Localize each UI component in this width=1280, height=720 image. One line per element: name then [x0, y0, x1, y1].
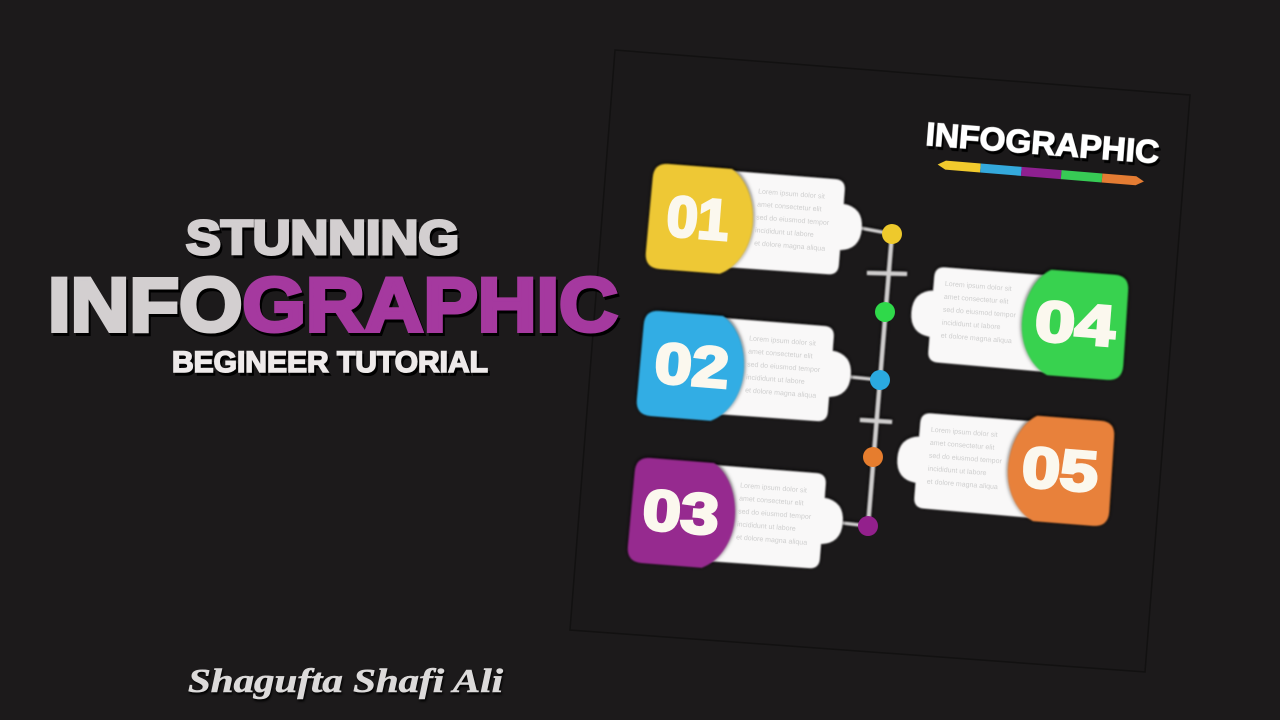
timeline dots	[858, 224, 902, 536]
card 04 text: incididunt ut labore	[942, 320, 1001, 331]
card 04 text: et dolore magna aliqua	[941, 333, 1012, 345]
card 02 text: incididunt ut labore	[746, 374, 805, 386]
card 04 text: amet consectetur elit	[944, 294, 1009, 306]
card 02 text: Lorem ipsum dolor sit	[749, 335, 816, 348]
card 02 text: et dolore magna aliqua	[745, 387, 816, 400]
card 03	[627, 457, 846, 578]
panel: tilted infographic sheet	[570, 50, 1190, 672]
author signature: Shagufta Shafi Ali	[188, 663, 504, 700]
card 03 text: Lorem ipsum dolor sit	[740, 482, 807, 495]
card 01	[645, 163, 865, 284]
card 02 text: amet consectetur elit	[748, 348, 813, 360]
card 05	[894, 405, 1116, 527]
card 04	[908, 259, 1130, 381]
card 05 number: 05	[1020, 435, 1101, 505]
card 02 text: sed do eiusmod tempor	[747, 361, 821, 374]
card 03 text: et dolore magna aliqua	[736, 534, 807, 547]
heading line: BEGINEER TUTORIAL: BEGINEER TUTORIAL	[172, 346, 488, 379]
timeline connector	[842, 228, 907, 526]
card 04 number: 04	[1033, 289, 1118, 359]
card 03 text: sed do eiusmod tempor	[738, 508, 812, 521]
card 02 number: 02	[652, 331, 731, 401]
card 04 text: sed do eiusmod tempor	[943, 307, 1017, 319]
colour bar under panel title	[937, 160, 1144, 186]
card 01 text: sed do eiusmod tempor	[756, 214, 830, 227]
card 05 text: sed do eiusmod tempor	[929, 453, 1003, 465]
card 03 number: 03	[640, 478, 721, 548]
card 04 text: Lorem ipsum dolor sit	[945, 281, 1012, 293]
card 05 text: Lorem ipsum dolor sit	[931, 427, 998, 439]
card 01 text: incididunt ut labore	[755, 227, 814, 239]
card 03 text: incididunt ut labore	[737, 521, 796, 533]
card 01 text: Lorem ipsum dolor sit	[758, 188, 825, 201]
card 05 text: et dolore magna aliqua	[927, 479, 998, 491]
heading line: INFOGRAPHIC: INFOGRAPHIC	[48, 263, 618, 348]
card 01 text: et dolore magna aliqua	[754, 240, 825, 253]
card 05 text: amet consectetur elit	[930, 440, 995, 452]
heading: stunning infographic tutorial	[48, 212, 618, 379]
card 02	[636, 310, 854, 431]
card 05 text: incididunt ut labore	[928, 466, 987, 477]
heading line: STUNNING: STUNNING	[186, 212, 459, 265]
card 01 text: amet consectetur elit	[757, 201, 822, 213]
card 01 number: 01	[664, 184, 731, 253]
panel title: INFOGRAPHIC: INFOGRAPHIC	[924, 116, 1161, 170]
card 03 text: amet consectetur elit	[739, 495, 804, 507]
